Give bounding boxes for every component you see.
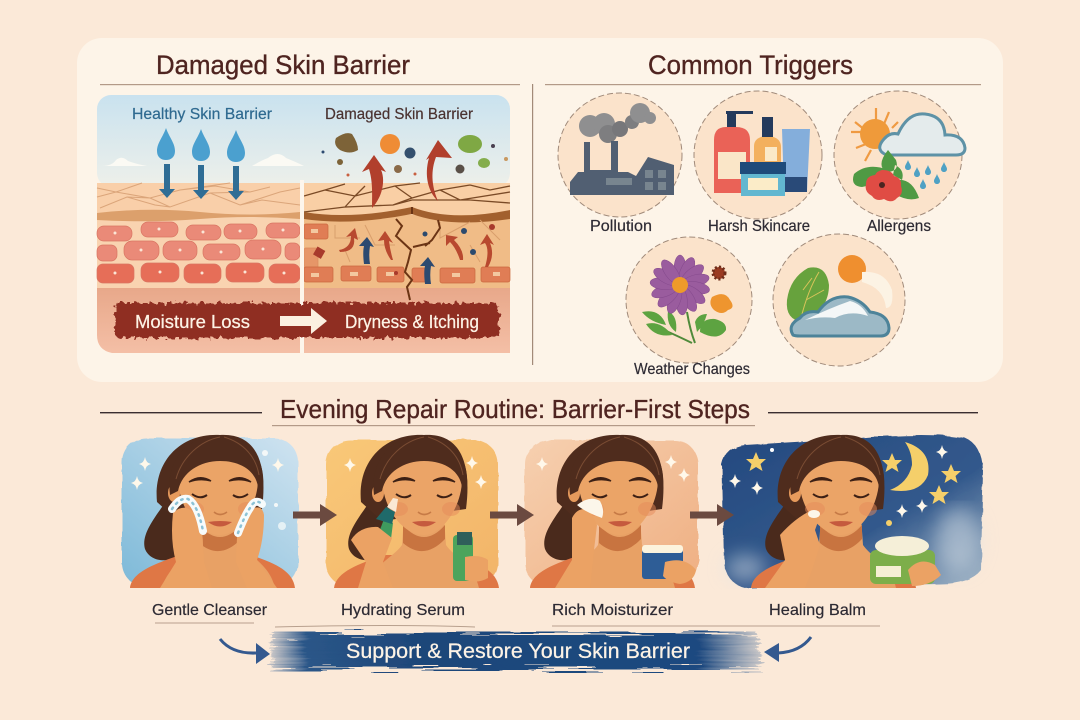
debris particles in skin xyxy=(313,224,495,275)
scene background xyxy=(722,435,983,588)
jar lid xyxy=(642,545,683,553)
leaves xyxy=(853,150,919,199)
divider: right heading underline xyxy=(545,84,981,85)
smoke xyxy=(579,103,656,143)
arrow: step 3 to 4 xyxy=(690,504,734,526)
cell centres xyxy=(311,229,500,277)
skin crack xyxy=(396,207,440,300)
circle xyxy=(834,91,962,219)
purple flower xyxy=(650,255,711,315)
sun rays xyxy=(851,108,898,161)
clouds xyxy=(102,154,304,166)
flower centre xyxy=(672,277,688,293)
cell outlines xyxy=(335,220,500,262)
healthy skin: cell layer xyxy=(97,214,300,290)
stem and leaves xyxy=(652,312,695,343)
label: Dryness & Itching: Dryness & Itching xyxy=(345,312,479,332)
woman xyxy=(530,435,695,588)
night sky haze xyxy=(725,508,980,582)
pollutant debris xyxy=(322,133,508,176)
circle xyxy=(773,234,905,366)
label: Rich Moisturizer: Rich Moisturizer xyxy=(552,602,674,619)
label: Pollution: Pollution xyxy=(590,218,652,235)
trigger: Harsh Skincare xyxy=(694,91,822,219)
stars xyxy=(729,445,961,526)
hand with jar xyxy=(663,560,696,584)
sparkles xyxy=(536,455,690,482)
serum dropper xyxy=(376,498,398,539)
wind swoosh xyxy=(862,272,892,308)
deep skin layer right xyxy=(304,288,510,353)
hand with dropper xyxy=(351,527,393,588)
skin divider xyxy=(300,180,304,353)
damaged broken cells xyxy=(304,224,510,283)
heading: Evening Repair Routine: Evening Repair Routine: Barrier-First Steps xyxy=(280,394,750,424)
circle xyxy=(694,91,822,219)
leaf xyxy=(787,267,829,322)
hands xyxy=(160,507,277,588)
step: Gentle Cleanser xyxy=(122,435,298,588)
hand xyxy=(555,509,597,588)
arrow: step 1 to 2 xyxy=(293,504,337,526)
panel: skin barrier illustration xyxy=(97,95,510,353)
heading: Damaged Skin Barrier: Damaged Skin Barrier xyxy=(156,50,410,80)
jar label xyxy=(876,566,901,577)
label: Allergens: Allergens xyxy=(867,218,931,235)
label: Moisture Loss: Moisture Loss xyxy=(135,312,250,332)
cloud xyxy=(791,297,889,336)
arrow: white xyxy=(280,308,327,334)
heading: Common Triggers: Common Triggers xyxy=(648,50,853,80)
cloud xyxy=(880,114,965,155)
label: Harsh Skincare: Harsh Skincare xyxy=(708,218,810,235)
balm dab xyxy=(808,510,820,518)
hand xyxy=(765,510,820,588)
sparkles xyxy=(131,450,286,530)
label: Damaged Skin Barrier: Damaged Skin Barrier xyxy=(325,106,473,123)
circle xyxy=(626,237,752,363)
cloud highlight xyxy=(805,301,868,320)
step: Hydrating Serum xyxy=(326,435,499,588)
blue tube xyxy=(782,129,810,192)
foam xyxy=(172,499,262,533)
label: Weather Changes: Weather Changes xyxy=(634,361,750,378)
red bottle label xyxy=(718,152,746,179)
arrow: banner left xyxy=(220,639,270,664)
trigger: Pollution xyxy=(558,93,682,217)
banner text: Support & Restore Your Skin Barrier xyxy=(346,640,690,663)
sun xyxy=(838,255,866,283)
jar lid xyxy=(875,536,929,556)
damaged skin surface cracks xyxy=(304,183,510,212)
scene background xyxy=(326,440,498,587)
banner xyxy=(272,633,759,669)
healthy cells xyxy=(97,222,300,283)
damaged skin surface xyxy=(304,183,510,216)
cell nuclei xyxy=(114,228,286,274)
hand with bottle xyxy=(465,556,488,582)
yellow bottle xyxy=(754,136,781,163)
surface crack lines xyxy=(97,183,300,208)
small arrows inside skin xyxy=(339,228,494,284)
factory windows xyxy=(606,170,666,190)
label: Gentle Cleanser: Gentle Cleanser xyxy=(152,602,268,619)
damaged brown band xyxy=(304,207,510,223)
pollen particle xyxy=(713,267,725,279)
band: moisture loss to dryness xyxy=(115,303,499,338)
step: Healing Balm xyxy=(722,435,983,588)
sparkles xyxy=(344,456,487,489)
woman xyxy=(751,435,916,588)
red pump bottle xyxy=(714,127,750,193)
trigger: leaf sun and cloud xyxy=(773,234,905,366)
green bottle xyxy=(453,535,473,581)
sun xyxy=(860,119,890,149)
arrow: step 2 to 3 xyxy=(490,504,534,526)
deep skin layer left xyxy=(97,288,300,353)
trigger: flower and pollen xyxy=(626,237,752,363)
divider: vertical xyxy=(532,84,533,365)
step: Rich Moisturizer xyxy=(525,435,698,588)
blue jar xyxy=(740,162,786,174)
blue jar xyxy=(642,546,683,579)
red arrows rising xyxy=(362,140,452,208)
sky background xyxy=(97,95,510,187)
hand with jar xyxy=(908,561,941,586)
down arrows xyxy=(159,164,244,200)
water drops xyxy=(157,128,245,162)
trigger: Allergens xyxy=(834,91,965,219)
woman xyxy=(130,435,295,588)
damaged skin cell layer xyxy=(304,215,510,290)
raindrops xyxy=(905,160,947,189)
woman xyxy=(334,435,499,588)
green jar xyxy=(870,550,935,584)
moon xyxy=(890,442,929,491)
scene background xyxy=(122,438,298,587)
navy particles xyxy=(422,228,476,255)
arrow: banner right xyxy=(764,637,811,662)
divider: left heading underline xyxy=(100,84,520,85)
label: Hydrating Serum: Hydrating Serum xyxy=(341,602,465,619)
cream on cheek xyxy=(577,499,603,518)
healthy skin: surface layer xyxy=(97,183,300,215)
banner stroke xyxy=(272,633,759,669)
flower xyxy=(866,170,902,201)
label: Healing Balm: Healing Balm xyxy=(769,602,866,619)
panel: top card xyxy=(77,38,1003,382)
divider: under labels xyxy=(155,623,880,627)
pollen blot xyxy=(710,294,733,313)
label: Healthy Skin Barrier: Healthy Skin Barrier xyxy=(132,106,272,123)
circle xyxy=(558,93,682,217)
healthy brown band xyxy=(97,210,300,221)
factory xyxy=(570,141,674,195)
leaf vein xyxy=(801,272,824,318)
scene background xyxy=(525,440,698,587)
